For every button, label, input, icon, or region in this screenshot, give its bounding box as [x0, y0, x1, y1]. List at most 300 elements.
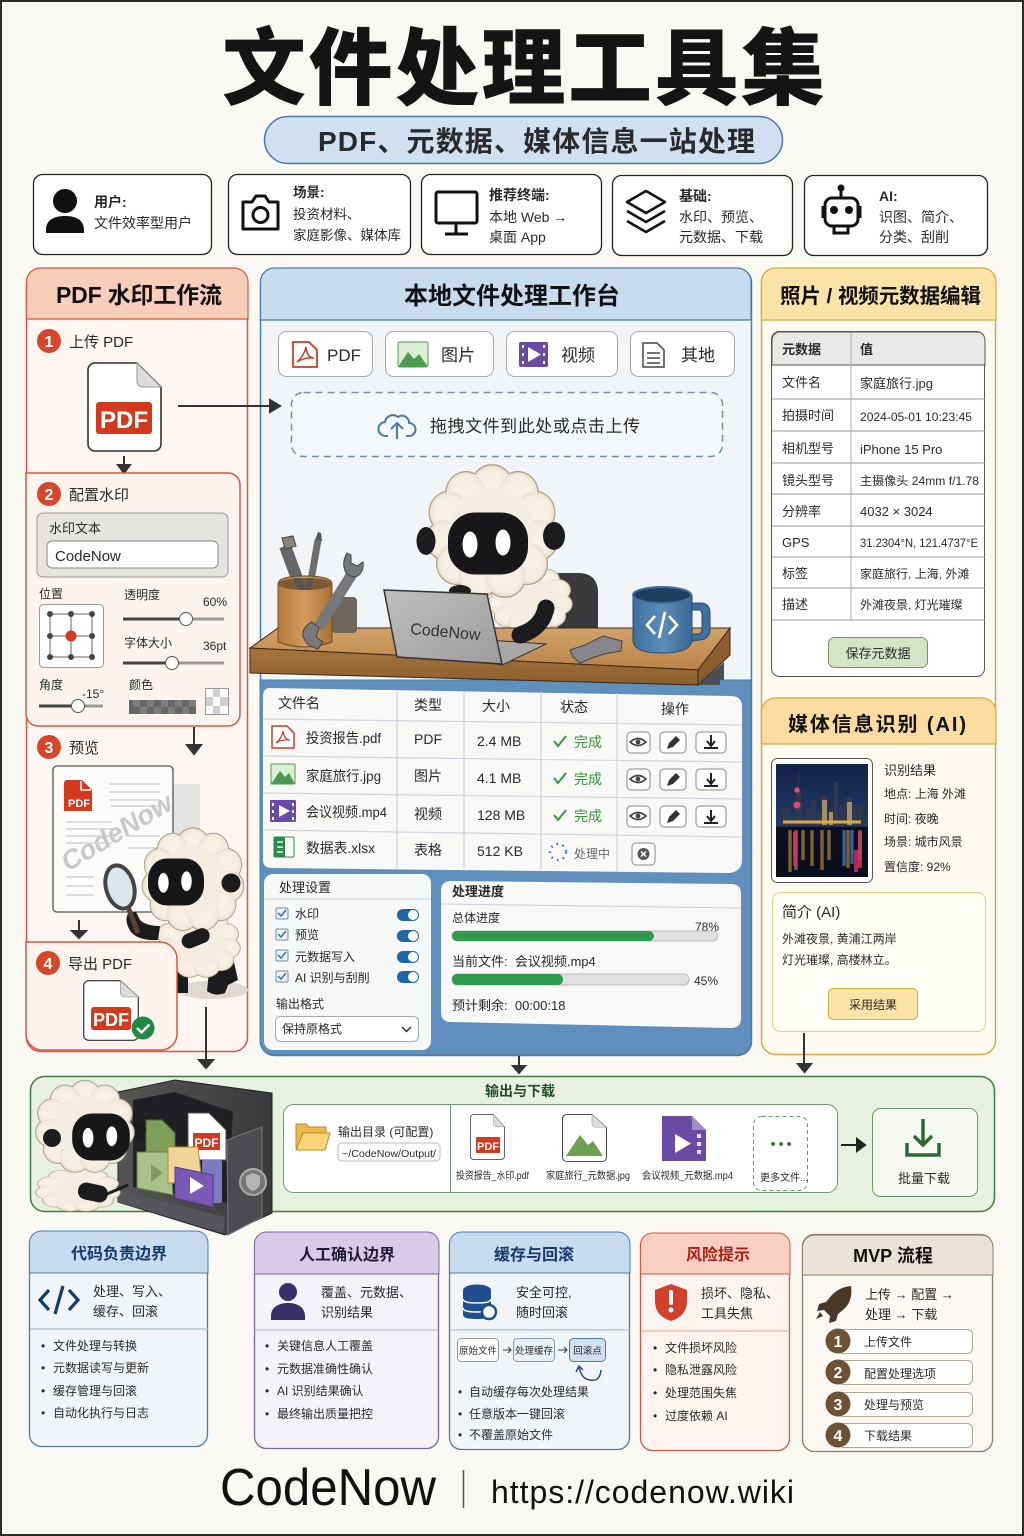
card bullets: 文件损坏风险 — [665, 1340, 737, 1355]
tab: video — [506, 332, 618, 376]
flow step 4: 下载结果 — [864, 1429, 912, 1443]
icon: code — [40, 1286, 78, 1314]
footer divider — [462, 1470, 464, 1508]
file: pdf output: 投资报告_水印.pdf — [456, 1169, 529, 1182]
row: xlsx — [274, 837, 655, 865]
info card: user — [34, 174, 212, 254]
file: mp4 output — [642, 1116, 733, 1182]
row: mp4 — [270, 800, 726, 827]
apply button — [828, 988, 918, 1020]
panel: step 4 export: PDF — [93, 1010, 129, 1030]
flow step 3: 处理与预览 — [864, 1397, 924, 1412]
rollback flow — [458, 1338, 606, 1380]
card bullets: • — [653, 1363, 657, 1377]
table header — [278, 695, 689, 717]
arrow: PDF to workbench — [178, 400, 280, 412]
row: xlsx: 表格 — [414, 842, 442, 858]
card bullets: 不覆盖原始文件 — [469, 1427, 553, 1442]
rollback flow: 回滚点 — [573, 1345, 602, 1357]
watermark text input — [37, 513, 228, 577]
arrow: to step 4 — [72, 920, 86, 938]
metadata table: 镜头型号 — [782, 473, 834, 488]
angle slider: -15° — [82, 687, 104, 701]
flow step 2 — [826, 1360, 972, 1384]
step 1 — [37, 329, 133, 353]
card bullets: • — [653, 1386, 657, 1400]
card: MVP flow — [802, 1234, 993, 1452]
card header — [640, 1233, 790, 1274]
icon: rocket — [816, 1286, 851, 1323]
position grid — [39, 586, 104, 668]
row: mp4: 完成 — [574, 808, 602, 824]
scene text: 场景: — [293, 185, 324, 200]
color swatch — [129, 677, 228, 714]
summary box: 简介 (AI) — [782, 904, 840, 921]
card bullets — [265, 1338, 373, 1421]
panel heading: 输出与下载 — [485, 1083, 555, 1099]
summary box — [772, 892, 986, 1032]
mascot head — [416, 465, 565, 597]
row: xlsx: 处理中 — [574, 846, 610, 861]
card bullets: • — [458, 1428, 462, 1442]
user text: 文件效率型用户 — [94, 215, 192, 231]
photo: city night view — [772, 758, 872, 882]
recognition results: 时间: 夜晚 — [884, 811, 939, 826]
card header — [254, 1232, 439, 1274]
card: cache and rollback — [450, 1232, 630, 1450]
icon: PDF file: PDF — [100, 407, 148, 434]
overall progress: 总体进度 — [452, 910, 500, 925]
recognition results: 地点: 上海 外滩 — [884, 786, 966, 801]
icon: cloud upload — [378, 415, 416, 439]
card bullets: 自动化执行与日志 — [53, 1406, 149, 1420]
card summary — [701, 1286, 779, 1321]
metadata table: iPhone 15 Pro — [860, 442, 942, 457]
card bullets: 关键信息人工覆盖 — [277, 1338, 373, 1353]
row: xlsx: 数据表.xlsx — [306, 840, 375, 856]
processing settings panel — [264, 874, 431, 1050]
card: code boundary — [30, 1231, 208, 1446]
illustration: safe: PDF — [194, 1136, 218, 1150]
file: jpg output: 家庭旅行_元数据.jpg — [546, 1169, 630, 1182]
apply button: 采用结果 — [849, 998, 897, 1012]
panel: metadata editor — [762, 268, 996, 1054]
card: human confirmation — [254, 1232, 439, 1448]
card summary: 识别结果 — [321, 1305, 373, 1320]
upload dropzone: 拖拽文件到此处或点击上传 — [430, 417, 640, 436]
info card: AI — [804, 176, 988, 256]
footer url: https://codenow.wiki — [491, 1474, 794, 1510]
card bullets: • — [41, 1361, 45, 1375]
card bullets: • — [41, 1339, 45, 1353]
laptop — [384, 585, 546, 665]
output directory: ~/CodeNow/Output/ — [342, 1148, 436, 1160]
card bullets: • — [41, 1406, 45, 1420]
metadata table: 元数据 — [782, 342, 821, 357]
file: jpg output — [546, 1115, 630, 1182]
tab: video: 视频 — [561, 346, 595, 365]
card summary: 覆盖、元数据、 — [321, 1285, 412, 1300]
row: xlsx: 512 KB — [477, 843, 523, 859]
pen holder — [278, 532, 357, 647]
panel: step 4 export — [26, 942, 177, 1050]
icon: user — [46, 189, 84, 233]
tab: images: 图片 — [441, 346, 475, 365]
panel header — [762, 268, 996, 320]
card bullets: AI 识别结果确认 — [277, 1384, 364, 1398]
user text: 用户: — [94, 194, 127, 210]
metadata table: 主摄像头 24mm f/1.78 — [860, 473, 979, 488]
output format select: 保持原格式 — [282, 1021, 342, 1036]
metadata table: GPS — [782, 535, 810, 550]
flow step 3 — [826, 1392, 972, 1416]
option: watermark: 水印 — [295, 907, 319, 921]
card bullets: 任意版本一键回滚 — [469, 1406, 565, 1421]
panel: step 2 configure watermark — [26, 473, 240, 726]
panel header — [260, 268, 751, 320]
flow step 4: 4 — [834, 1428, 843, 1445]
card bullets: • — [458, 1385, 462, 1399]
summary box: 外滩夜景, 黄浦江两岸 — [782, 931, 897, 946]
opacity slider: 透明度 — [124, 587, 160, 602]
icon: camera — [243, 196, 278, 229]
foundation text — [679, 188, 763, 245]
laptop: CodeNow — [410, 621, 482, 644]
info card: foundation — [612, 176, 792, 256]
scene text — [293, 185, 401, 243]
row: mp4: 128 MB — [477, 807, 525, 823]
angle slider: 角度 — [39, 677, 63, 692]
metadata table: 家庭旅行, 上海, 外滩 — [860, 566, 969, 581]
flow step 1: 1 — [834, 1334, 843, 1351]
wrench — [318, 574, 352, 628]
flow step 2: 配置处理选项 — [864, 1367, 936, 1381]
card bullets: • — [653, 1341, 657, 1355]
flow step 3: 3 — [834, 1397, 843, 1414]
tab: other — [630, 332, 734, 376]
row: jpg — [271, 764, 726, 790]
safe files — [146, 1120, 175, 1153]
illustration: safe — [118, 1080, 272, 1235]
panel: step 4 export: 4 — [44, 956, 53, 973]
save button — [828, 638, 928, 668]
option: metadata: 元数据写入 — [295, 949, 355, 964]
panel: step 2 configure watermark: 2 — [45, 487, 54, 504]
wrench heads — [303, 553, 363, 649]
card: risk warning — [640, 1233, 790, 1450]
preview document: CodeNow — [56, 786, 180, 877]
arrow: PDF panel to output — [199, 1007, 213, 1068]
processing progress panel — [441, 881, 741, 1028]
arrow: metadata to output — [798, 1033, 811, 1072]
card summary: 损坏、隐私、 — [701, 1286, 779, 1301]
foundation text: 基础: — [679, 188, 712, 204]
card heading: 缓存与回滚 — [494, 1245, 574, 1264]
card bullets: 缓存管理与回滚 — [53, 1383, 137, 1398]
current file progress: 当前文件: 会议视频.mp4 — [452, 954, 596, 969]
row: jpg: 图片 — [414, 768, 442, 784]
output inner card — [284, 1104, 838, 1192]
subtitle banner — [264, 116, 782, 164]
opacity slider — [123, 587, 227, 626]
arrow: to batch download — [841, 1139, 865, 1151]
card bullets: • — [41, 1384, 45, 1398]
row: pdf: 完成 — [574, 734, 602, 750]
panel heading: 照片 / 视频元数据编辑 — [780, 284, 981, 308]
tab: PDF: PDF — [327, 346, 361, 365]
metadata table: 标签 — [782, 566, 808, 581]
AI text: AI: — [879, 188, 898, 204]
card summary — [321, 1285, 412, 1320]
card summary — [865, 1287, 954, 1322]
mascot arm — [520, 608, 546, 635]
recognition results: 识别结果 — [884, 763, 936, 778]
position grid: 位置 — [39, 586, 63, 601]
panel: PDF watermark workflow — [26, 268, 248, 1052]
output format select — [276, 996, 418, 1042]
upload dropzone — [292, 392, 722, 456]
icon: database — [463, 1284, 496, 1319]
card heading: 代码负责边界 — [71, 1244, 167, 1263]
card summary: 随时回滚 — [516, 1305, 568, 1320]
metadata table: 4032 × 3024 — [860, 504, 933, 519]
panel heading: PDF 水印工作流 — [56, 282, 222, 308]
tab: images — [386, 332, 494, 376]
step 3 preview: 3 — [45, 740, 54, 757]
processing settings panel: 处理设置 — [279, 880, 331, 895]
panel: local file workbench — [250, 268, 752, 1056]
arrow: to step 3 — [187, 727, 201, 754]
font size slider: 36pt — [203, 639, 227, 653]
illustration: mascot at desk — [250, 465, 730, 685]
card bullets: 元数据准确性确认 — [277, 1361, 373, 1376]
metadata table: 文件名 — [782, 375, 821, 390]
preview document — [53, 766, 200, 912]
AI text: 分类、刮削 — [879, 229, 949, 245]
step 1: 1 — [45, 334, 54, 351]
font size slider — [123, 635, 227, 670]
card header — [30, 1231, 208, 1273]
card bullets: 隐私泄露风险 — [665, 1362, 737, 1377]
foundation text: 水印、预览、 — [679, 209, 763, 225]
card summary — [516, 1285, 572, 1320]
card bullets: 处理范围失焦 — [665, 1385, 737, 1400]
save button: 保存元数据 — [845, 646, 911, 661]
icon: monitor — [436, 192, 477, 234]
file: mp4 output: 会议视频_元数据.mp4 — [642, 1169, 733, 1182]
flow step 4 — [826, 1422, 972, 1448]
time remaining: 预计剩余: 00:00:18 — [452, 998, 565, 1013]
table header: 大小 — [482, 698, 510, 714]
terminal text: 推荐终端: — [489, 187, 550, 203]
card summary: 工具失焦 — [701, 1306, 753, 1321]
step 1: 上传 PDF — [69, 334, 133, 351]
summary box: 灯光璀璨, 高楼林立。 — [782, 952, 897, 967]
recognition results — [884, 763, 966, 874]
section: media recognition — [762, 698, 996, 1032]
option: AI: AI 识别与刮削 — [295, 971, 370, 985]
card bullets: • — [265, 1407, 269, 1421]
card heading: MVP 流程 — [853, 1246, 933, 1266]
subtitle banner: PDF、元数据、媒体信息一站处理 — [318, 126, 755, 157]
icon: PDF file — [88, 363, 161, 451]
section: media recognition: 媒体信息识别 (AI) — [788, 712, 966, 736]
desk — [250, 628, 730, 685]
flow step 1 — [826, 1328, 972, 1354]
card summary: 缓存、回滚 — [93, 1304, 158, 1319]
small tool — [570, 636, 622, 663]
card heading: 人工确认边界 — [299, 1246, 395, 1264]
card header — [450, 1232, 630, 1273]
angle slider — [39, 677, 104, 712]
card bullets — [458, 1384, 589, 1442]
batch download button — [872, 1108, 978, 1196]
card bullets: 最终输出质量把控 — [277, 1406, 373, 1421]
color swatch: 颜色 — [129, 677, 153, 692]
option: preview: 预览 — [295, 927, 319, 942]
AI text: 识图、简介、 — [879, 209, 963, 225]
preview document: PDF — [68, 798, 90, 810]
scene text: 投资材料、 — [293, 207, 360, 222]
panel: step 4 export: 导出 PDF — [68, 956, 132, 973]
output directory: 输出目录 (可配置) — [338, 1124, 433, 1139]
card summary: 处理、写入、 — [93, 1284, 171, 1299]
recognition results: 置信度: 92% — [884, 859, 951, 874]
table header: 类型 — [414, 697, 442, 713]
table header: 文件名 — [278, 695, 320, 711]
table header: 状态 — [560, 699, 588, 715]
overall progress — [452, 910, 719, 941]
card summary: 上传 → 配置 → — [865, 1287, 954, 1302]
row: jpg: 完成 — [574, 771, 602, 787]
mascot with files — [36, 1081, 146, 1211]
terminal text: 本地 Web → — [489, 209, 567, 225]
card summary: 处理 → 下载 — [865, 1307, 937, 1322]
mug — [633, 587, 710, 653]
option: metadata — [276, 949, 419, 964]
card heading: 风险提示 — [686, 1245, 750, 1264]
output format select: 输出格式 — [276, 996, 324, 1011]
option: preview — [276, 927, 419, 942]
icon: robot — [823, 186, 860, 233]
flow step 2: 2 — [834, 1365, 843, 1382]
opacity slider: 60% — [203, 595, 227, 609]
chair — [555, 573, 598, 633]
metadata table: 值 — [860, 342, 873, 357]
file: pdf output: PDF — [477, 1141, 499, 1153]
output directory — [296, 1124, 440, 1161]
terminal text: 桌面 App — [489, 229, 546, 245]
rollback flow: 原始文件 — [459, 1345, 497, 1357]
foundation text: 元数据、下载 — [679, 229, 763, 245]
card bullets — [653, 1340, 737, 1423]
metadata table: 拍摄时间 — [782, 408, 834, 423]
batch download button: 批量下载 — [898, 1171, 950, 1186]
panel: output and download — [30, 1076, 994, 1235]
icon: shield — [655, 1284, 687, 1321]
card bullets: • — [265, 1362, 269, 1376]
row: jpg: 家庭旅行.jpg — [306, 768, 381, 784]
card bullets: 过度依赖 AI — [665, 1408, 728, 1423]
row: pdf: 2.4 MB — [477, 733, 521, 749]
card header — [802, 1235, 993, 1275]
row: jpg: 4.1 MB — [477, 770, 521, 786]
row: mp4: 视频 — [414, 806, 442, 822]
mascot with magnifier — [101, 828, 248, 999]
card bullets: • — [265, 1384, 269, 1398]
metadata table: 外滩夜景, 灯光璀璨 — [860, 597, 963, 612]
footer brand: CodeNow — [220, 1459, 436, 1517]
current file progress: 45% — [694, 974, 718, 988]
card bullets: • — [653, 1409, 657, 1423]
file table — [263, 688, 742, 873]
step 3 preview — [37, 735, 99, 759]
metadata table: 分辨率 — [782, 504, 821, 519]
arrow: to step 2 — [118, 456, 130, 473]
row: pdf: PDF — [414, 731, 442, 747]
panel: step 2 configure watermark: 配置水印 — [69, 487, 129, 504]
step 3 preview: 预览 — [69, 740, 99, 757]
info card: terminal — [422, 174, 602, 254]
card bullets: 文件处理与转换 — [53, 1338, 137, 1353]
option: watermark — [276, 907, 419, 921]
overall progress: 78% — [695, 920, 719, 934]
metadata table: 31.2304°N, 121.4737°E — [860, 536, 978, 550]
title: 文件处理工具集 — [222, 22, 825, 116]
info card: scene — [228, 174, 410, 254]
more files: 更多文件... — [760, 1171, 808, 1184]
row: pdf: 投资报告.pdf — [306, 730, 381, 746]
metadata table: 相机型号 — [782, 441, 834, 456]
terminal text — [489, 187, 567, 245]
option: AI — [276, 971, 419, 985]
tab: PDF — [278, 332, 372, 376]
lower blue frame — [260, 680, 751, 1055]
mascot body — [488, 566, 572, 633]
user text — [94, 194, 192, 231]
card bullets: • — [265, 1339, 269, 1353]
card bullets: 自动缓存每次处理结果 — [469, 1384, 589, 1399]
font size slider: 字体大小 — [124, 635, 172, 650]
arrow: workbench to output — [513, 1056, 525, 1073]
tab: other: 其地 — [681, 346, 715, 365]
card summary: 安全可控, — [516, 1285, 572, 1300]
recognition results: 场景: 城市风景 — [884, 834, 963, 849]
more files — [754, 1116, 808, 1190]
panel header — [26, 268, 248, 319]
card summary — [93, 1284, 171, 1319]
metadata table: 2024-05-01 10:23:45 — [860, 410, 972, 424]
file: pdf output — [456, 1115, 529, 1182]
rollback flow: 处理缓存 — [515, 1345, 553, 1357]
card bullets: 元数据读写与更新 — [53, 1360, 149, 1375]
watermark text input: 水印文本 — [49, 521, 101, 536]
icon: person — [271, 1283, 305, 1320]
flow step 1: 上传文件 — [864, 1334, 912, 1349]
current file progress — [452, 954, 718, 988]
metadata table: 家庭旅行.jpg — [860, 376, 933, 391]
table header: 操作 — [661, 701, 689, 717]
card bullets — [41, 1338, 149, 1420]
metadata table — [772, 332, 985, 676]
watermark text input: CodeNow — [55, 548, 121, 565]
icon: layers — [627, 191, 665, 232]
row: mp4: 会议视频.mp4 — [306, 804, 387, 820]
scene text: 家庭影像、媒体库 — [293, 227, 401, 243]
panel heading: 本地文件处理工作台 — [404, 282, 620, 310]
processing progress panel: 处理进度 — [452, 884, 504, 899]
metadata table: 描述 — [782, 597, 808, 612]
